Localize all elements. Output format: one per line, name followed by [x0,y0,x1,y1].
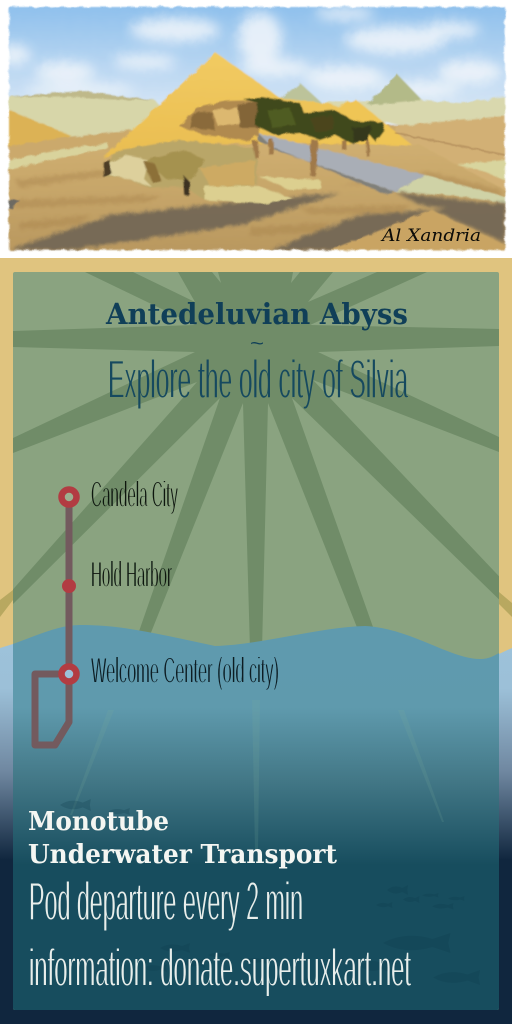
underwater light rays [70,775,444,850]
station: Hold Harbor: Hold Harbor [91,553,172,595]
sphinx [107,139,258,198]
station: Welcome Center [62,649,279,691]
shadows [10,192,505,250]
distant dunes [8,95,160,138]
station: Candela City [62,473,178,515]
heading: Monotube Underwater Transport: Monotube [28,806,169,837]
caption: Al Xandria: Al Xandria [380,226,481,246]
line [35,497,69,745]
website info: information: donate.supertuxkart.net [29,940,411,998]
station: Hold Harbor [62,553,172,595]
photo: desert pyramids and sphinx [0,7,505,250]
title: Antedeluvian Abyss [105,297,408,331]
main pyramid [104,52,364,158]
fence [395,133,505,155]
station: Candela City: Candela City [91,473,178,515]
back pyramids [280,82,322,105]
transit line map [35,473,279,745]
ground [8,168,506,251]
subtitle: Explore the old city of Silvia [108,351,408,410]
heading: Monotube Underwater Transport: Underwater Transport [28,839,338,870]
palm canopy [243,97,385,145]
panel [0,272,512,1010]
departure info: Pod departure every 2 min [29,873,303,932]
sunburst rays [0,272,512,650]
left pyramid [9,110,72,147]
road [258,133,425,192]
fish school [60,800,130,814]
right hills [396,115,506,188]
base ground behind pyramids [7,124,404,160]
water [13,625,499,1010]
palm trunks [252,139,370,176]
sky [9,7,505,127]
station: Welcome Center: Welcome Center (old city) [91,649,279,691]
poster background [0,258,512,1024]
heading: Monotube Underwater Transport [28,806,338,870]
tilde divider: ~ [250,333,264,355]
